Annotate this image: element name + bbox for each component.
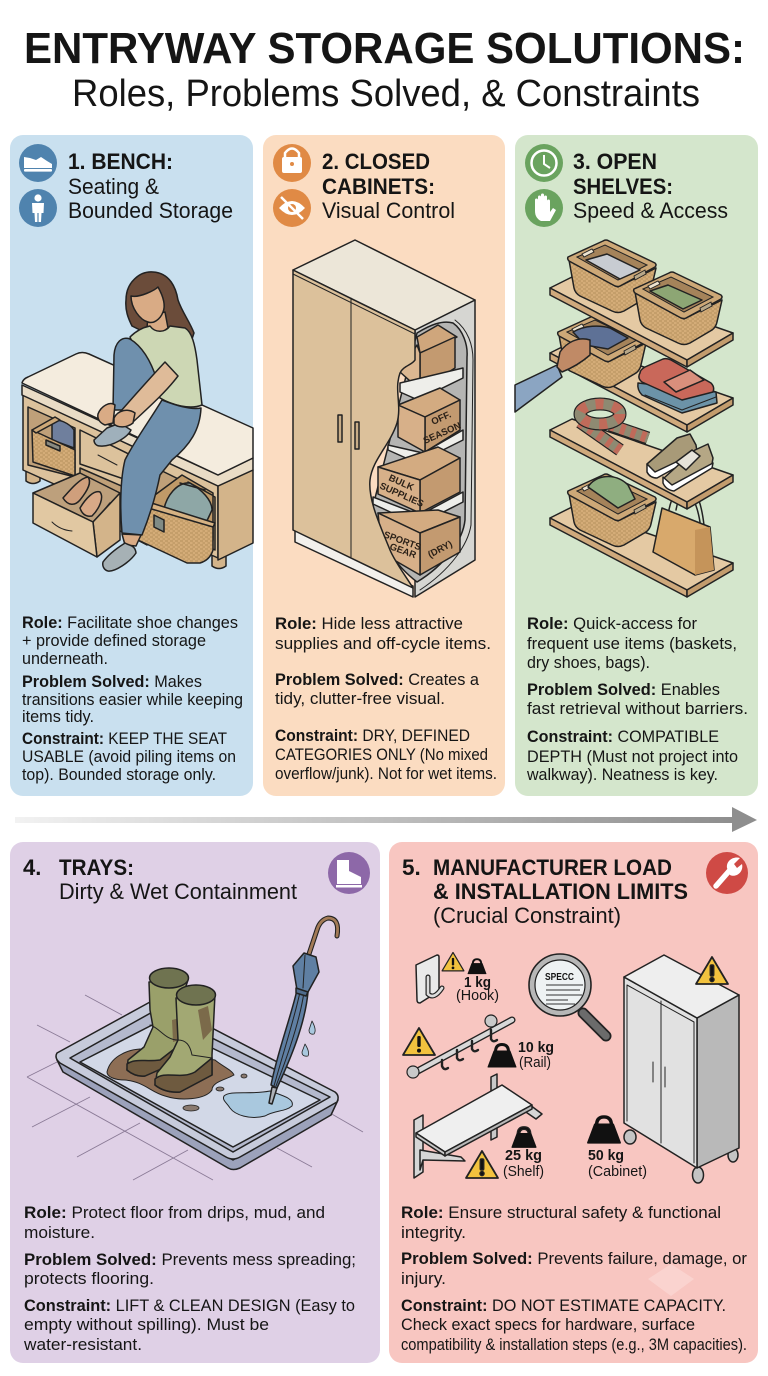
wicker basket right [140, 475, 213, 540]
box labels: SUPPLIES [378, 481, 425, 510]
role text: Role: Quick-access for [527, 614, 697, 633]
heading: 2. CLOSED [322, 149, 430, 174]
cushion [22, 385, 253, 486]
illustration: shelves with baskets [515, 240, 733, 597]
role text: frequent use items (baskets, [527, 634, 737, 653]
title: ENTRYWAY STORAGE SOLUTIONS: [24, 24, 745, 73]
panel background [263, 135, 505, 796]
arm and hand reaching [515, 339, 590, 412]
box labels: GEAR [388, 541, 418, 561]
role text: Role: Protect floor from drips, mud, and [24, 1203, 325, 1222]
role text: DEPTH (Must not project into [527, 747, 738, 766]
heading: Dirty & Wet Containment [59, 879, 297, 904]
heading: Speed & Access [573, 198, 728, 223]
role text: top). Bounded storage only. [22, 765, 216, 784]
woman [126, 272, 194, 345]
shelf with 25 kg: (Shelf) [503, 1163, 544, 1180]
role text: Constraint: KEEP THE SEAT [22, 729, 227, 748]
heading: Seating & [68, 174, 159, 199]
role text: USABLE (avoid piling items on [22, 747, 236, 766]
role text: supplies and off-cycle items. [275, 634, 491, 653]
heading: 5. [402, 855, 421, 880]
icon: boot [328, 852, 370, 894]
heading: SHELVES: [573, 174, 673, 199]
role text: overflow/junk). Not for wet items. [275, 764, 497, 783]
icon: clock [525, 144, 563, 182]
role text: Role: Hide less attractive [275, 614, 463, 633]
heading [573, 149, 728, 223]
role text [401, 1203, 747, 1354]
heading [402, 855, 688, 928]
role text: fast retrieval without barriers. [527, 699, 748, 718]
role text [23, 1203, 356, 1354]
role text: Constraint: LIFT & CLEAN DESIGN (Easy to [24, 1296, 355, 1315]
floor grid [27, 995, 363, 1180]
heading: 3. OPEN [573, 149, 657, 174]
illustration: woman tying shoe on bench [22, 272, 253, 571]
role text: walkway). Neatness is key. [526, 765, 718, 784]
hook with 1 kg: 1 kg [464, 974, 491, 991]
role text: Constraint: COMPATIBLE [527, 727, 719, 746]
cabinet with 50 kg [588, 955, 739, 1183]
box labels: BULK [387, 473, 415, 494]
panel: open shelves [515, 135, 758, 796]
box labels: SEASON [422, 420, 463, 447]
role text: tidy, clutter-free visual. [275, 689, 445, 708]
role text: items tidy. [22, 707, 94, 726]
heading [322, 149, 455, 223]
role text: Role: Ensure structural safety & functional [401, 1203, 721, 1222]
panel background [10, 135, 253, 796]
panel background [10, 842, 380, 1363]
box labels: SPORTS [382, 529, 422, 553]
drawer [33, 473, 120, 522]
role text [275, 614, 497, 783]
icon: hidden eye [273, 189, 311, 227]
heading: & INSTALLATION LIMITS [433, 879, 688, 904]
cabinet with 50 kg: 50 kg [588, 1147, 624, 1164]
role text: + provide defined storage [22, 631, 206, 650]
arrow [15, 807, 757, 832]
shelf with 25 kg [414, 1074, 544, 1180]
heading: 1. BENCH: [68, 149, 173, 174]
role text: Problem Solved: Creates a [275, 670, 480, 689]
heading [68, 149, 233, 223]
left boot [127, 980, 188, 1076]
role text: protects flooring. [24, 1269, 154, 1288]
shelf with 25 kg: 25 kg [505, 1147, 542, 1164]
rail with 10 kg: 10 kg [518, 1039, 554, 1056]
folded blankets [638, 359, 717, 413]
cabinet with 50 kg: (Cabinet) [588, 1163, 647, 1180]
illustration: cabinet cutaway with boxes [293, 240, 475, 597]
panel background [515, 135, 758, 796]
role text [526, 614, 748, 784]
subtitle: Roles, Problems Solved, & Constraints [72, 73, 700, 115]
umbrella [309, 918, 338, 954]
icon: shoe [19, 144, 57, 182]
cabinet door [293, 270, 415, 588]
role text [22, 613, 243, 784]
hanging bag [653, 488, 714, 575]
role text: Check exact specs for hardware, surface [401, 1315, 695, 1334]
box labels: OFF. [430, 409, 453, 428]
role text: Constraint: DO NOT ESTIMATE CAPACITY. [401, 1296, 726, 1315]
role text: Problem Solved: Enables [527, 680, 720, 699]
role text: empty without spilling). Must be [24, 1315, 269, 1334]
magnifier with spec sheet [529, 954, 606, 1036]
illustration: tray with boots and umbrella [56, 918, 338, 1170]
hook with 1 kg [416, 952, 499, 1004]
icon: wrench [706, 852, 748, 894]
heading: MANUFACTURER LOAD [433, 855, 672, 880]
box labels: (DRY) [426, 539, 454, 561]
role text: moisture. [24, 1223, 95, 1242]
role text: transitions easier while keeping [22, 690, 243, 709]
box 3 [378, 447, 460, 480]
icon: person [19, 189, 57, 227]
role text: Problem Solved: Prevents failure, damage, or [401, 1249, 747, 1268]
role text: Problem Solved: Prevents mess spreading; [24, 1250, 356, 1269]
role text: Constraint: DRY, DEFINED [275, 726, 470, 745]
role text: integrity. [401, 1223, 466, 1242]
hook with 1 kg: (Hook) [456, 987, 499, 1004]
rail with 10 kg [403, 1015, 554, 1078]
role text: Role: Facilitate shoe changes [22, 613, 238, 632]
role text: water-resistant. [23, 1335, 142, 1354]
heading: Visual Control [322, 198, 455, 223]
box 1 [417, 325, 457, 353]
panel background [389, 842, 758, 1363]
role text: Problem Solved: Makes [22, 672, 202, 691]
box labels [378, 409, 463, 561]
role text: CATEGORIES ONLY (No mixed [275, 745, 488, 764]
rail with 10 kg: (Rail) [519, 1054, 551, 1071]
role text: underneath. [22, 649, 108, 668]
panel: bench [10, 135, 253, 796]
role text: injury. [401, 1269, 446, 1288]
sneakers [647, 434, 713, 491]
icon: hand [525, 189, 563, 227]
right boot [155, 994, 215, 1092]
heading: CABINETS: [322, 174, 435, 199]
icon: lock [273, 144, 311, 182]
box 2 [398, 388, 460, 417]
magnifier with spec sheet: SPECC [545, 971, 574, 983]
heading: TRAYS: [59, 855, 134, 880]
heading: (Crucial Constraint) [433, 903, 621, 928]
panel: manufacturer limits [389, 842, 758, 1363]
scarf [580, 404, 648, 450]
heading [23, 855, 297, 904]
panel: trays [10, 842, 380, 1363]
role text: dry shoes, bags). [527, 653, 650, 672]
heading: Bounded Storage [68, 198, 233, 223]
heading: 4. [23, 855, 41, 880]
panel: closed cabinets [263, 135, 505, 796]
box 4 [378, 510, 460, 533]
